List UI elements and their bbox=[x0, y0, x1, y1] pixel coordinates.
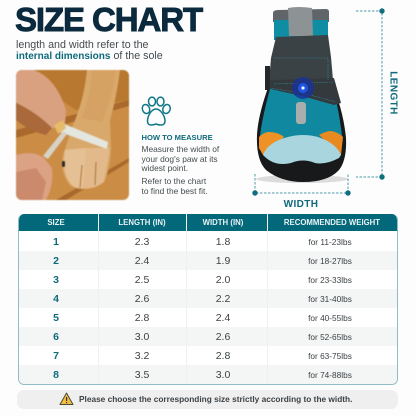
size table bbox=[18, 214, 398, 385]
row 2: 1.9 bbox=[216, 255, 230, 267]
how to measure heading: HOW TO MEASURE bbox=[142, 132, 213, 142]
how to measure text: widest point. Refer to the chart bbox=[142, 163, 206, 186]
row 6: 6 bbox=[53, 331, 59, 343]
length dimension bbox=[356, 8, 385, 180]
row 8 bbox=[19, 365, 399, 384]
how to measure text: your dog's paw at its bbox=[142, 154, 218, 164]
row 1: 1 bbox=[53, 236, 59, 248]
row 3: 2.5 bbox=[135, 274, 149, 286]
table header: RECOMMENDED WEIGHT bbox=[284, 218, 380, 227]
row 3: 2.0 bbox=[216, 274, 230, 286]
row 2: 2 bbox=[53, 255, 59, 267]
row 2 bbox=[19, 251, 399, 270]
row 1: for 11-23lbs bbox=[308, 237, 352, 247]
row 5: 2.8 bbox=[135, 312, 149, 324]
row 8: for 74-88lbs bbox=[308, 370, 352, 380]
row 8: 3.0 bbox=[216, 369, 230, 381]
row 2: 2.4 bbox=[135, 255, 149, 267]
warning text: Please choose the corresponding size strictly according to the width. bbox=[79, 394, 352, 404]
photo: measuring a dog paw bbox=[15, 69, 130, 201]
row 2: for 18-27lbs bbox=[308, 256, 352, 266]
row 4: for 31-40lbs bbox=[308, 294, 352, 304]
subtitle bbox=[16, 38, 163, 62]
row 6: 2.6 bbox=[216, 331, 230, 343]
row 3 bbox=[53, 274, 352, 286]
icon: paw bbox=[142, 96, 171, 126]
row 6 bbox=[19, 327, 399, 346]
boot bbox=[256, 7, 348, 183]
row 4: 4 bbox=[53, 293, 59, 305]
row 7: 2.8 bbox=[216, 350, 230, 362]
row 3: 3 bbox=[53, 274, 59, 286]
table header bbox=[19, 214, 399, 231]
row 6: for 52-65lbs bbox=[308, 332, 352, 342]
row 5 bbox=[53, 312, 352, 324]
table header: LENGTH (IN) bbox=[118, 218, 166, 227]
table header: WIDTH (IN) bbox=[203, 218, 243, 227]
row 3: for 23-33lbs bbox=[308, 275, 352, 285]
title: SIZE CHART bbox=[15, 1, 202, 38]
row 5: for 40-55lbs bbox=[308, 313, 352, 323]
row 5: 5 bbox=[53, 312, 59, 324]
subtitle: internal dimensions of the sole bbox=[16, 50, 163, 62]
row 1: 2.3 bbox=[135, 236, 149, 248]
subtitle: length and width refer to the bbox=[16, 38, 148, 50]
row 8: 3.5 bbox=[135, 369, 149, 381]
illustration: boot with dimension lines bbox=[252, 7, 398, 210]
how to measure text: to find the best fit. bbox=[142, 186, 208, 196]
length label: LENGTH bbox=[388, 71, 398, 115]
warning bar bbox=[17, 390, 398, 409]
row 5: 2.4 bbox=[216, 312, 230, 324]
row 7: for 63-75lbs bbox=[308, 351, 352, 361]
row 4: 2.6 bbox=[135, 293, 149, 305]
how to measure text: Measure the width of bbox=[142, 144, 219, 154]
table header: SIZE bbox=[47, 218, 65, 227]
row 1 bbox=[53, 236, 352, 248]
row 7: 7 bbox=[53, 350, 59, 362]
width dimension bbox=[252, 174, 351, 196]
row 8: 8 bbox=[53, 369, 59, 381]
row 4 bbox=[19, 289, 399, 308]
row 7 bbox=[53, 350, 352, 362]
width label: WIDTH bbox=[284, 199, 318, 210]
row 1: 1.8 bbox=[216, 236, 230, 248]
how to measure text bbox=[142, 144, 220, 196]
icon: warning triangle bbox=[60, 392, 74, 405]
row 4: 2.2 bbox=[216, 293, 230, 305]
row 6: 3.0 bbox=[135, 331, 149, 343]
row 7: 3.2 bbox=[135, 350, 149, 362]
